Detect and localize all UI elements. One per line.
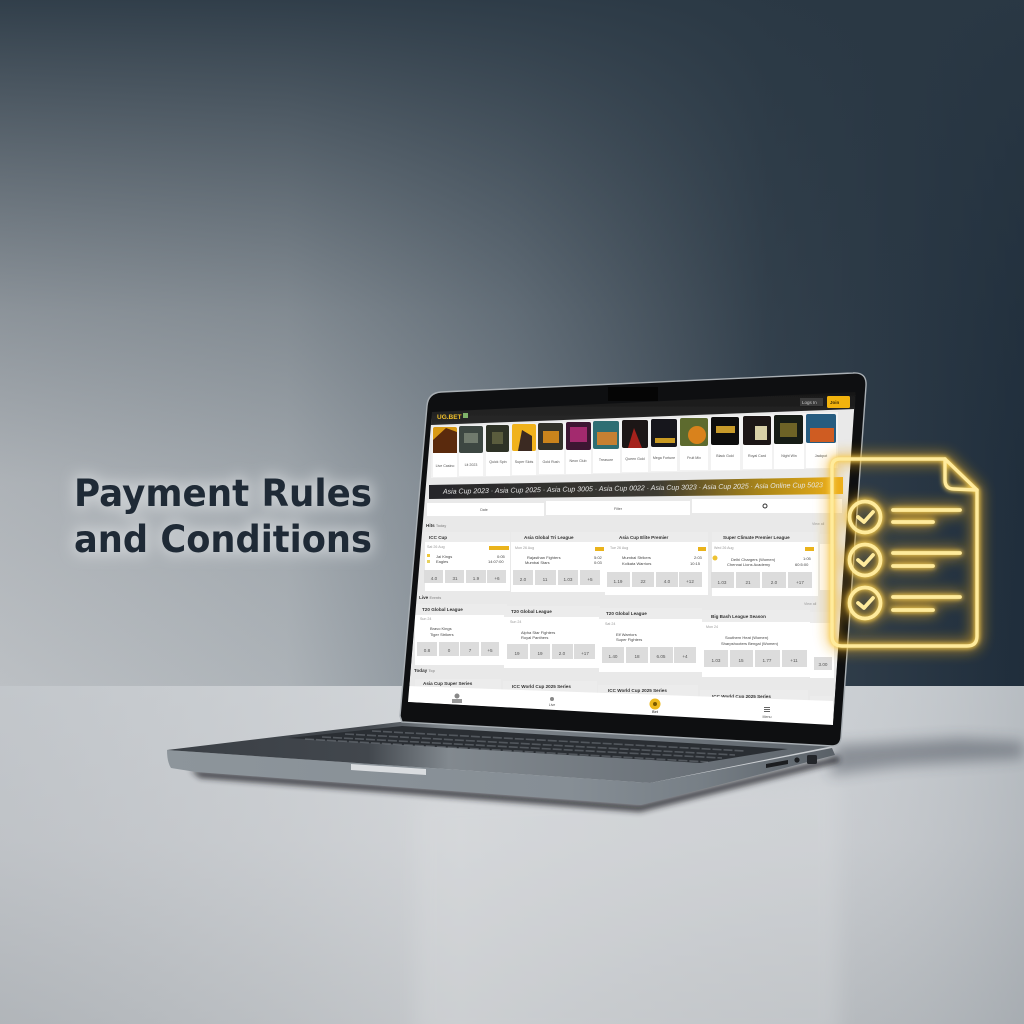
match card 3: 22 bbox=[640, 579, 646, 584]
match card 8 bbox=[599, 608, 702, 672]
ticker banner: Asia Cup 2023 · Asia Cup 2025 · Asia Cup 3005 · Asia Cup 0022 · Asia Cup 3023 · Asia Cup 2025 · Asia Online Cup 5023 bbox=[442, 482, 823, 496]
match card 4 bbox=[711, 532, 818, 596]
match card 7: T20 Global League bbox=[511, 609, 552, 614]
match card 3 bbox=[605, 532, 708, 595]
match card 3: Asia Cup Elite Premier bbox=[619, 535, 668, 540]
section heading: row two bbox=[419, 596, 816, 605]
game card labels: Treasure bbox=[599, 458, 613, 462]
match card 4: 2.0 bbox=[771, 580, 778, 585]
game card labels: Night Win bbox=[781, 454, 797, 458]
match card 2: 1.03 bbox=[564, 577, 573, 582]
match card 9: +11 bbox=[790, 658, 798, 663]
match card 5 bbox=[820, 544, 829, 590]
game card labels: Jackpot bbox=[815, 454, 827, 458]
bottom navigation bar bbox=[408, 686, 833, 726]
filter bar: Filter bbox=[614, 507, 623, 511]
match card 3: 10:15 bbox=[690, 561, 701, 566]
match card 7: 2.0 bbox=[559, 651, 566, 656]
game card labels: Fruit Mix bbox=[687, 456, 701, 460]
match card 9: Southern Heat (Women) bbox=[725, 635, 769, 640]
match card 7 bbox=[504, 606, 600, 668]
logo: UG.BET bbox=[437, 414, 462, 421]
match card 1: 1.9 bbox=[473, 576, 480, 581]
side ports bbox=[766, 755, 817, 768]
match cards row three bbox=[423, 682, 771, 698]
laptop base front face bbox=[167, 748, 835, 805]
nav icon: menu bbox=[762, 707, 772, 719]
match card 9 bbox=[702, 610, 810, 677]
match card 1: 14:07:00 bbox=[488, 559, 504, 564]
match card 6: Tiger Strikers bbox=[430, 632, 454, 637]
match card 2: Asia Global Tri League bbox=[524, 535, 574, 540]
top navigation bar: Logs In bbox=[802, 400, 817, 405]
match card 1: Jai Kings bbox=[436, 554, 452, 559]
section heading: row one: View all bbox=[812, 522, 825, 526]
match card 4: 60:5:00 bbox=[795, 562, 809, 567]
match card 1 bbox=[424, 532, 510, 591]
match card 3: 4.0 bbox=[664, 579, 671, 584]
match card 4: +17 bbox=[796, 580, 804, 585]
match card 10 bbox=[810, 623, 834, 678]
match card 2: Mumbai Stars bbox=[525, 560, 550, 565]
match card 3: Mumbai Strikers bbox=[622, 555, 651, 560]
screen bbox=[408, 381, 856, 726]
reflective floor bbox=[0, 686, 1024, 1024]
match card 8: T20 Global League bbox=[606, 611, 647, 616]
match card 3: 1.19 bbox=[614, 579, 623, 584]
match card 8: 1.40 bbox=[609, 654, 618, 659]
background wall bbox=[0, 0, 1024, 690]
match card 6 bbox=[415, 604, 507, 665]
section heading: row two: View all bbox=[804, 602, 817, 606]
ticker banner bbox=[429, 477, 843, 499]
match cards row three: ICC World Cup 2025 Series bbox=[608, 688, 667, 693]
document fold bbox=[945, 459, 977, 490]
match card 6: 0.8 bbox=[424, 648, 431, 653]
laptop shadow on floor bbox=[190, 738, 1024, 812]
match card 1: 0:05 bbox=[497, 554, 506, 559]
laptop deck bbox=[167, 722, 838, 783]
match card 8: 6.05 bbox=[657, 654, 666, 659]
match cards row three: ICC World Cup 2025 Series bbox=[712, 694, 771, 699]
match card 7: Alpha Star Fighters bbox=[521, 630, 555, 635]
match card 9: Sharpshooters Bengal (Women) bbox=[721, 641, 779, 646]
match card 1: 31 bbox=[452, 576, 458, 581]
check item 3 bbox=[850, 588, 960, 618]
section heading: row two: Live Events bbox=[419, 595, 441, 600]
title: Payment Rules bbox=[74, 472, 372, 515]
game card labels: Queen Gold bbox=[625, 457, 645, 461]
game thumbnails row bbox=[431, 412, 838, 478]
match card 2: 0:03 bbox=[594, 560, 603, 565]
match card 2: Mon 26 Aug bbox=[515, 546, 534, 550]
filter bar bbox=[427, 499, 842, 516]
match card 4: Chennai Lions Academy bbox=[727, 562, 770, 567]
match card 2: Rajasthan Fighters bbox=[527, 555, 561, 560]
match card 3: 2:03 bbox=[694, 555, 703, 560]
nav icon: bet active bbox=[650, 698, 660, 714]
check item 1 bbox=[850, 502, 960, 532]
top navigation bar bbox=[431, 392, 856, 425]
document outline bbox=[832, 459, 977, 646]
game artwork bbox=[433, 414, 836, 453]
match card 7: Sun 24 bbox=[510, 620, 521, 624]
title: and Conditions bbox=[74, 518, 372, 561]
laptop lid bbox=[400, 373, 866, 746]
match card 4: 1:05 bbox=[803, 556, 812, 561]
match card 4: 1.03 bbox=[718, 580, 727, 585]
camera notch bbox=[608, 387, 658, 401]
game card labels bbox=[433, 443, 836, 477]
match card 8: 18 bbox=[634, 654, 640, 659]
filter bar: Date bbox=[480, 508, 488, 512]
match card 7: 19 bbox=[537, 651, 543, 656]
game card labels: Live Casino bbox=[436, 464, 454, 468]
match card 9: 1.03 bbox=[712, 658, 721, 663]
match card 8: Super Fighters bbox=[616, 637, 642, 642]
title: and Conditions bbox=[74, 518, 372, 561]
match card 9: Mon 24 bbox=[706, 625, 718, 629]
match card 1: 4.0 bbox=[431, 576, 438, 581]
nav icon: menu: Menu bbox=[762, 715, 772, 719]
match card 6: +5 bbox=[487, 648, 493, 653]
game card labels: Lit 2023 bbox=[465, 463, 477, 467]
match card 6: Bravo Kings bbox=[430, 626, 452, 631]
match card 6: Sun 24 bbox=[420, 617, 431, 621]
match card 7: 19 bbox=[514, 651, 520, 656]
match card 2: 5:02 bbox=[594, 555, 603, 560]
game card labels: Super Slots bbox=[515, 460, 533, 464]
nav icon: bet active: Bet bbox=[652, 710, 659, 714]
section heading: row one: Hits Today bbox=[426, 523, 446, 528]
keyboard bbox=[288, 726, 788, 763]
match card 7: Royal Panthers bbox=[521, 635, 548, 640]
match card 8: Elf Warriors bbox=[616, 632, 637, 637]
match cards row three: Asia Cup Super Series bbox=[423, 681, 473, 686]
game card labels: Mega Fortune bbox=[653, 456, 675, 460]
game card labels: Neon Club bbox=[570, 459, 586, 463]
match card 6: T20 Global League bbox=[422, 607, 463, 612]
match card 4: Wed 26 Aug bbox=[714, 546, 734, 550]
match card 4: Delhi Chargers (Women) bbox=[731, 557, 776, 562]
match card 6: 0 bbox=[448, 648, 451, 653]
match cards row three: ICC World Cup 2025 Series bbox=[512, 684, 571, 689]
match card 2: 2.0 bbox=[520, 577, 527, 582]
title bbox=[74, 472, 372, 561]
match card 8: Sat 24 bbox=[605, 622, 615, 626]
laptop bbox=[167, 373, 866, 805]
match card 10: 3.00 bbox=[819, 662, 828, 667]
match card 3: +12 bbox=[686, 579, 694, 584]
match card 1: ICC Cup bbox=[429, 535, 447, 540]
match card 2: +5 bbox=[587, 577, 593, 582]
game card labels: Quick Spin bbox=[489, 460, 507, 464]
match card 3: Kolkata Warriors bbox=[622, 561, 651, 566]
match card 1: +6 bbox=[494, 576, 500, 581]
match card 2 bbox=[511, 532, 607, 592]
match card 9: 1.77 bbox=[763, 658, 772, 663]
match card 6: 7 bbox=[469, 648, 472, 653]
top navigation bar: Join bbox=[830, 400, 840, 405]
match card 1: Sat 26 Aug bbox=[427, 545, 445, 549]
match cards row two bbox=[415, 604, 834, 678]
match card 1: Eagles bbox=[436, 559, 448, 564]
match card 2: 11 bbox=[543, 577, 548, 582]
section heading: row three: Today Top bbox=[414, 668, 436, 673]
section heading: row one bbox=[426, 522, 825, 528]
match card 3: Tue 26 Aug bbox=[610, 546, 628, 550]
game card labels: Black Gold bbox=[716, 454, 734, 458]
game card labels: Royal Card bbox=[748, 454, 766, 458]
nav icon: live: Live bbox=[549, 703, 555, 707]
game card labels: Gold Rush bbox=[543, 460, 559, 464]
match card 9: 15 bbox=[738, 658, 744, 663]
match card 4: 21 bbox=[745, 580, 751, 585]
match card 9: Big Bash League Season bbox=[711, 614, 766, 619]
check item 2 bbox=[850, 544, 960, 576]
front notch bbox=[351, 764, 426, 775]
match cards row one bbox=[424, 532, 834, 596]
nav icon: sports bbox=[452, 694, 462, 703]
nav icon: live bbox=[549, 697, 555, 706]
match card 4: Super Climate Premier League bbox=[723, 535, 790, 540]
title: Payment Rules bbox=[74, 472, 372, 515]
icon: glowing checklist document bbox=[832, 459, 977, 646]
match card 7: +17 bbox=[581, 651, 589, 656]
match card 8: +4 bbox=[682, 654, 688, 659]
